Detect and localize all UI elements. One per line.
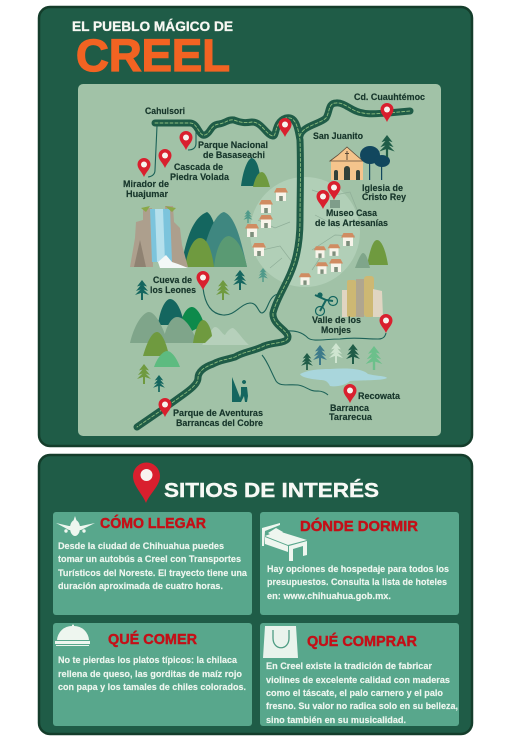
road network — [137, 103, 410, 427]
body text: presupuestos. Consulta la lista de hoteles — [267, 577, 447, 587]
body text: En Creel existe la tradición de fabricar — [266, 661, 433, 671]
body text: fresno. Su valor no radica solo en su belleza, — [266, 701, 458, 711]
body text: rellena de queso, las gorditas de maíz rojo — [58, 669, 243, 679]
icon: airplane — [56, 516, 95, 536]
icon: lower mountains — [130, 299, 249, 367]
map labels: Cristo Rey — [362, 192, 406, 202]
title: El pueblo mágico de: EL PUEBLO MÁGICO DE — [72, 19, 233, 34]
title: Creel: CREEL — [76, 30, 230, 81]
map labels: Piedra Volada — [170, 172, 229, 182]
map labels: Tararecua — [329, 412, 372, 422]
icon: climber — [232, 377, 248, 402]
map labels: Cd. Cuauhtémoc — [354, 92, 425, 102]
heading: dónde dormir: DÓNDE DORMIR — [300, 517, 419, 535]
icon: bed — [262, 523, 307, 561]
body text — [267, 564, 449, 601]
icon: hills east — [355, 240, 388, 268]
map labels: Cueva de — [153, 275, 192, 285]
body text: con papa y los tamales de chiles colorados. — [58, 682, 246, 692]
map pins — [138, 103, 394, 417]
card: dónde dormir — [260, 512, 459, 615]
card: qué comer — [53, 623, 252, 726]
body text: en: www.chihuahua.gob.mx. — [267, 591, 391, 601]
icon: mountains near Basaseachi — [241, 158, 270, 187]
icon: trees beside the church — [360, 135, 395, 180]
map labels: Monjes — [321, 325, 351, 335]
icon: lake — [300, 369, 387, 386]
panel: map panel — [39, 7, 472, 446]
body text: sino también en su musicalidad. — [266, 715, 406, 725]
map labels: de las Artesanías — [315, 218, 388, 228]
body text: duración aproximada de cuatro horas. — [58, 581, 223, 591]
map labels: Parque de Aventuras — [173, 408, 263, 418]
icon: waterfall and mountains — [130, 206, 247, 268]
map labels: Huajumar — [126, 189, 169, 199]
body text: violines de excelente calidad con maderas — [266, 675, 450, 685]
map labels: los Leones — [150, 285, 196, 295]
map labels: Barranca — [330, 403, 369, 413]
icon: shopping bag — [263, 626, 298, 658]
body text: No te pierdas los platos típicos: la chilaca — [58, 655, 237, 665]
card: cómo llegar — [53, 512, 252, 615]
town area circle — [250, 177, 360, 287]
icon: forest by the lake — [301, 343, 382, 370]
icon: large location pin — [133, 462, 160, 503]
body text — [266, 661, 458, 725]
body text: Desde la ciudad de Chihuahua puedes — [58, 541, 224, 551]
body text — [58, 541, 247, 591]
map labels: Mirador de — [123, 179, 169, 189]
map labels: Cascada de — [174, 162, 223, 172]
icon: church of Cristo Rey — [330, 147, 363, 180]
map labels: de Basaseachi — [203, 150, 265, 160]
icon: serving cloche — [55, 625, 90, 646]
map labels: Iglesia de — [362, 183, 403, 193]
map labels: Barrancas del Cobre — [176, 418, 263, 428]
heading: cómo llegar: CÓMO LLEGAR — [100, 514, 207, 532]
map background — [78, 84, 441, 436]
icon: Valle de los Monjes rocks — [342, 276, 383, 317]
body text: como el táscate, el palo carnero y el palo — [266, 688, 444, 698]
heading: qué comprar: QUÉ COMPRAR — [307, 633, 418, 650]
heading: sitios de interés: SITIOS DE INTERÉS — [164, 479, 379, 502]
heading: qué comer: QUÉ COMER — [108, 631, 198, 648]
icon: town houses — [245, 188, 355, 285]
icon: trees — [135, 210, 268, 392]
map labels: San Juanito — [313, 131, 364, 141]
map labels: Cahulsori — [145, 106, 185, 116]
thin rivers and trails — [148, 126, 386, 395]
icon: cyclist — [315, 293, 338, 316]
map labels: Museo Casa — [326, 208, 377, 218]
icon: museum building — [330, 200, 340, 208]
body text: Turísticos del Noreste. El trayecto tiene una — [58, 568, 247, 578]
map labels: Valle de los — [312, 315, 361, 325]
body text: tomar un autobús a Creel con Transportes — [58, 554, 241, 564]
card: qué comprar — [260, 623, 459, 726]
map labels — [123, 92, 425, 428]
body text — [58, 655, 246, 692]
body text: Hay opciones de hospedaje para todos los — [267, 564, 449, 574]
map labels: Parque Nacional — [198, 140, 268, 150]
map labels: Recowata — [358, 391, 400, 401]
panel: sitios de interés — [39, 455, 472, 734]
